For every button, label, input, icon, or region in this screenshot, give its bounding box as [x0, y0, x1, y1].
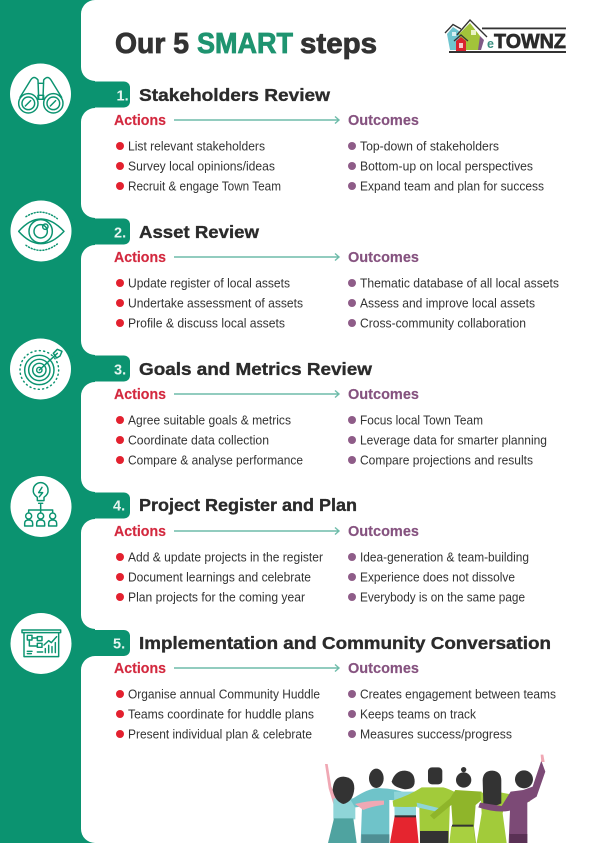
step 4 number: 4.	[113, 498, 125, 514]
step 1 actions list: Recruit & engage Town Team	[128, 180, 281, 194]
step 3 outcomes list: Leverage data for smarter planning	[360, 434, 547, 448]
step 4 actions list: Add & update projects in the register	[128, 550, 323, 564]
step 4 actions list: Document learnings and celebrate	[128, 570, 311, 584]
step 4 outcomes label: Outcomes	[348, 524, 419, 540]
person 2	[351, 769, 408, 843]
step 1 actions list: List relevant stakeholders	[128, 140, 265, 154]
step 4 outcomes list: Everybody is on the same page	[360, 590, 525, 604]
step 4 outcomes list	[348, 550, 529, 604]
icon: lightbulb and team	[10, 476, 72, 537]
step 5 outcomes list: Creates engagement between teams	[360, 688, 556, 702]
person 6	[477, 771, 530, 843]
step 2 outcomes list	[348, 276, 559, 330]
step 3 actions list: Compare & analyse performance	[128, 454, 303, 468]
step 2 number: 2.	[114, 226, 126, 242]
step 5 heading: Implementation and Community Conversation	[139, 633, 551, 653]
step 3 number: 3.	[114, 362, 126, 378]
step 1 outcomes list: Bottom-up on local perspectives	[360, 160, 533, 174]
step 1 heading: Stakeholders Review	[139, 85, 330, 105]
step 2 outcomes list: Assess and improve local assets	[360, 296, 535, 310]
step 2 actions list	[116, 276, 303, 330]
step 1 outcomes list: Top-down of stakeholders	[360, 140, 499, 154]
step 4 outcomes list: Experience does not dissolve	[360, 570, 515, 584]
step 1 outcomes list	[348, 140, 544, 194]
person 3	[390, 771, 419, 843]
step 5 actions label and arrow: Actions	[114, 661, 166, 677]
step 1 actions label and arrow: Actions	[114, 113, 166, 129]
step 1 actions list	[116, 140, 281, 194]
step 2 actions list: Undertake assessment of assets	[128, 296, 303, 310]
step 2 heading: Asset Review	[139, 222, 259, 242]
step 2 actions label and arrow	[114, 250, 339, 266]
icon: binoculars	[10, 64, 71, 124]
step 5 actions label and arrow	[114, 661, 339, 677]
step 2 actions label and arrow: Actions	[114, 250, 166, 266]
step 5 outcomes label: Outcomes	[348, 661, 419, 677]
step 3 outcomes label: Outcomes	[348, 387, 419, 403]
step 5 outcomes list: Measures success/progress	[360, 728, 512, 742]
step 3 outcomes list	[348, 414, 547, 468]
step 5 actions list	[116, 688, 320, 742]
step 3 actions list: Coordinate data collection	[128, 434, 269, 448]
person 1	[325, 764, 357, 843]
step 2 outcomes label: Outcomes	[348, 250, 419, 266]
step 1 actions list: Survey local opinions/ideas	[128, 160, 275, 174]
step 3 actions list: Agree suitable goals & metrics	[128, 414, 291, 428]
logo: eTOWNZ: e	[487, 37, 494, 51]
step 5 number: 5.	[113, 636, 125, 652]
person 4	[393, 767, 468, 843]
title: Our 5	[115, 28, 189, 60]
step 5 actions list: Teams coordinate for huddle plans	[128, 708, 314, 722]
step 4 actions label and arrow: Actions	[114, 524, 166, 540]
title: SMART	[197, 28, 294, 60]
title: steps	[300, 28, 377, 60]
step 2 actions list: Update register of local assets	[128, 276, 290, 290]
step 2 outcomes list: Cross-community collaboration	[360, 316, 526, 330]
step 4 actions label and arrow	[114, 524, 339, 540]
step 3 outcomes list: Compare projections and results	[360, 454, 533, 468]
step 3 outcomes list: Focus local Town Team	[360, 414, 483, 428]
step 3 actions label and arrow	[114, 387, 339, 403]
icon: eye	[10, 200, 72, 262]
title	[115, 28, 377, 60]
step 2 outcomes list: Thematic database of all local assets	[360, 276, 559, 290]
step 3 actions list	[116, 414, 303, 468]
step 1 outcomes label: Outcomes	[348, 113, 419, 129]
step 1 number: 1.	[116, 88, 129, 104]
icon: presentation board	[10, 613, 72, 674]
logo: eTOWNZ	[445, 20, 566, 53]
step 3 actions label and arrow: Actions	[114, 387, 166, 403]
step 5 actions list: Organise annual Community Huddle	[128, 688, 320, 702]
step 1 outcomes list: Expand team and plan for success	[360, 180, 544, 194]
step 2 actions list: Profile & discuss local assets	[128, 316, 285, 330]
icon: target	[10, 338, 71, 400]
step 4 outcomes list: Idea-generation & team-building	[360, 550, 529, 564]
step 4 actions list: Plan projects for the coming year	[128, 590, 305, 604]
step 4 actions list	[116, 550, 323, 604]
logo: eTOWNZ: TOWNZ	[494, 30, 566, 53]
step 4 heading: Project Register and Plan	[139, 495, 357, 515]
step 3 heading: Goals and Metrics Review	[139, 359, 372, 379]
step 1 actions label and arrow	[114, 113, 339, 129]
person 5	[430, 767, 482, 843]
person 7	[478, 755, 545, 843]
step 5 actions list: Present individual plan & celebrate	[128, 728, 312, 742]
step 5 outcomes list: Keeps teams on track	[360, 708, 477, 722]
illustration: group of friends arm in arm	[325, 755, 545, 843]
step 5 outcomes list	[348, 688, 556, 742]
